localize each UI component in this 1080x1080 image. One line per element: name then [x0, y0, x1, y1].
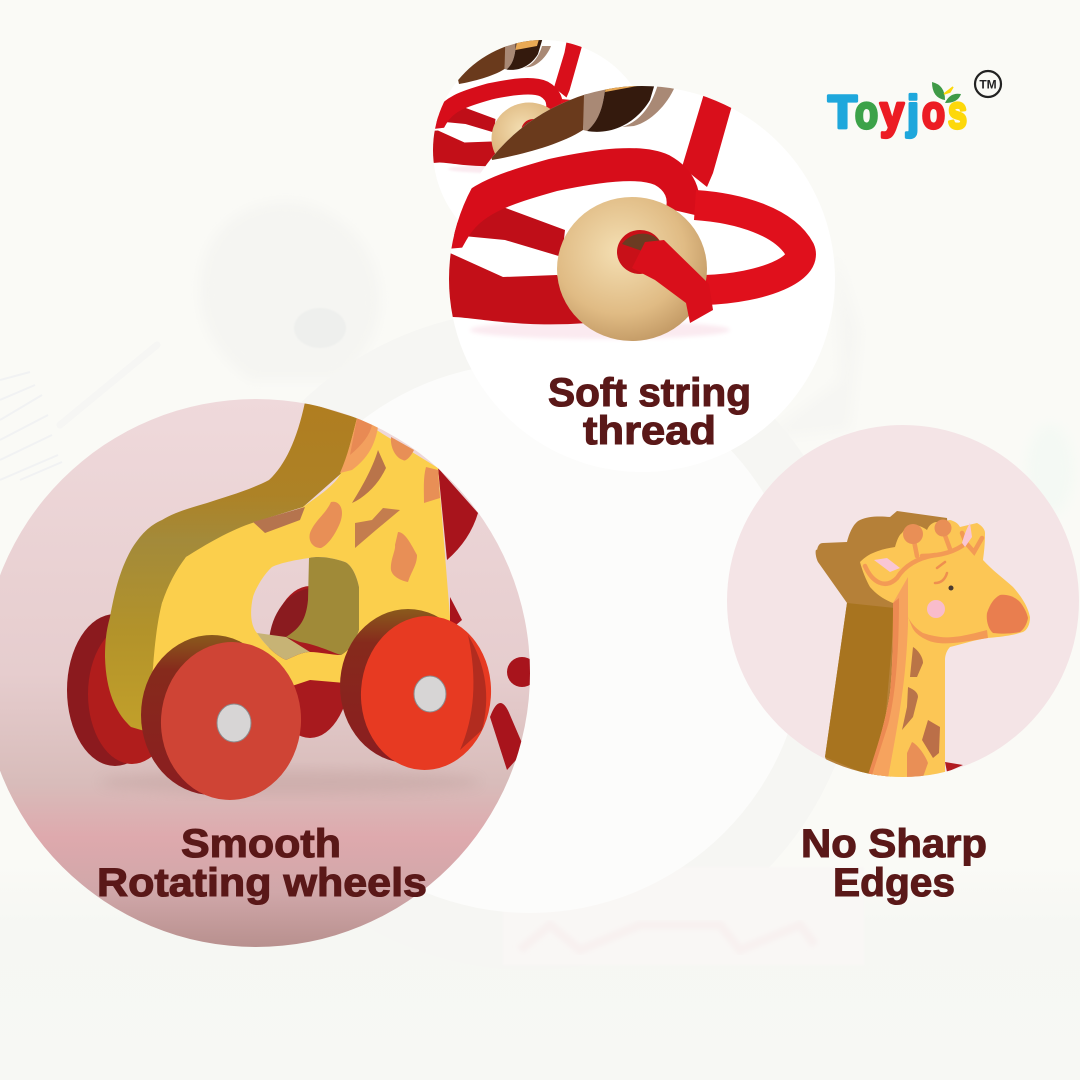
caption: No Sharp Edges: Edges — [833, 861, 955, 905]
front photo circle: string with wooden bead — [449, 86, 835, 450]
rear left wheel — [67, 614, 127, 766]
caption: Soft string thread: thread — [583, 409, 716, 453]
caption: Soft string thread: Soft string — [548, 371, 751, 415]
pink cheek — [927, 600, 945, 618]
inner translucent white circle — [255, 363, 805, 913]
faded green patch — [1026, 424, 1074, 516]
rear middle wheel — [268, 586, 352, 738]
back photo circle: string detail — [433, 40, 632, 220]
orange mane — [868, 577, 908, 778]
front right wheel — [340, 609, 439, 762]
trademark badge — [975, 71, 1001, 97]
rope under neck — [945, 762, 963, 772]
giraffe head toy — [816, 511, 1030, 780]
pale pink circle backdrop — [727, 425, 1079, 777]
logo wordmark: s — [948, 86, 967, 138]
caption: Soft string thread — [548, 371, 751, 453]
floor shadow — [118, 772, 462, 792]
faded puzzle card — [503, 867, 864, 965]
logo wordmark: y — [880, 86, 904, 138]
caption: No Sharp Edges: No Sharp — [801, 822, 987, 866]
horn tips — [903, 524, 923, 544]
faded striped sleeve — [0, 372, 62, 480]
yellow face and neck — [860, 520, 1030, 780]
inner wood of cut-out — [286, 557, 359, 655]
panel: soft string thread — [433, 40, 835, 450]
front left axle bolt — [217, 704, 251, 742]
logo wordmark: j — [906, 86, 919, 138]
logo wordmark — [828, 86, 967, 138]
caption: Smooth Rotating wheels: Smooth — [181, 822, 341, 866]
yellow face of body — [150, 418, 450, 700]
brand logo: Toyjos — [828, 71, 1001, 138]
neck spots — [902, 647, 940, 777]
smile under head — [908, 617, 988, 643]
logo wordmark: T — [828, 86, 857, 138]
pink ears — [874, 558, 900, 572]
logo leaves — [932, 82, 961, 103]
logo wordmark: o — [855, 86, 878, 138]
caption: No Sharp Edges — [801, 822, 987, 905]
faded stick — [60, 345, 157, 425]
wooden side of head and neck — [816, 511, 950, 780]
caption: Smooth Rotating wheels: Rotating wheels — [97, 861, 427, 905]
wooden side edge — [105, 402, 357, 732]
panel: no sharp edges — [727, 425, 1079, 905]
caption: Smooth Rotating wheels — [97, 822, 427, 905]
orange horn crown — [865, 530, 982, 584]
lower inner wood of cut-out — [257, 633, 310, 660]
giraffe spots — [253, 418, 440, 582]
pink circle backdrop — [0, 399, 530, 947]
darker mane strip — [868, 598, 899, 775]
front left wheel — [141, 635, 244, 794]
front right axle bolt — [414, 676, 446, 712]
red rope behind toy — [438, 468, 537, 770]
trademark badge: TM — [979, 78, 997, 92]
faded child head — [200, 202, 380, 380]
panel: smooth rotating wheels — [0, 399, 537, 947]
faded child shirt on the right — [760, 250, 860, 440]
eye and brow — [935, 562, 954, 590]
logo wordmark: o — [922, 86, 945, 138]
orange nose — [987, 595, 1028, 634]
faded grass band — [0, 860, 1080, 1080]
large translucent grey-white circle — [200, 310, 860, 970]
giraffe toy body with wheels — [67, 402, 537, 805]
